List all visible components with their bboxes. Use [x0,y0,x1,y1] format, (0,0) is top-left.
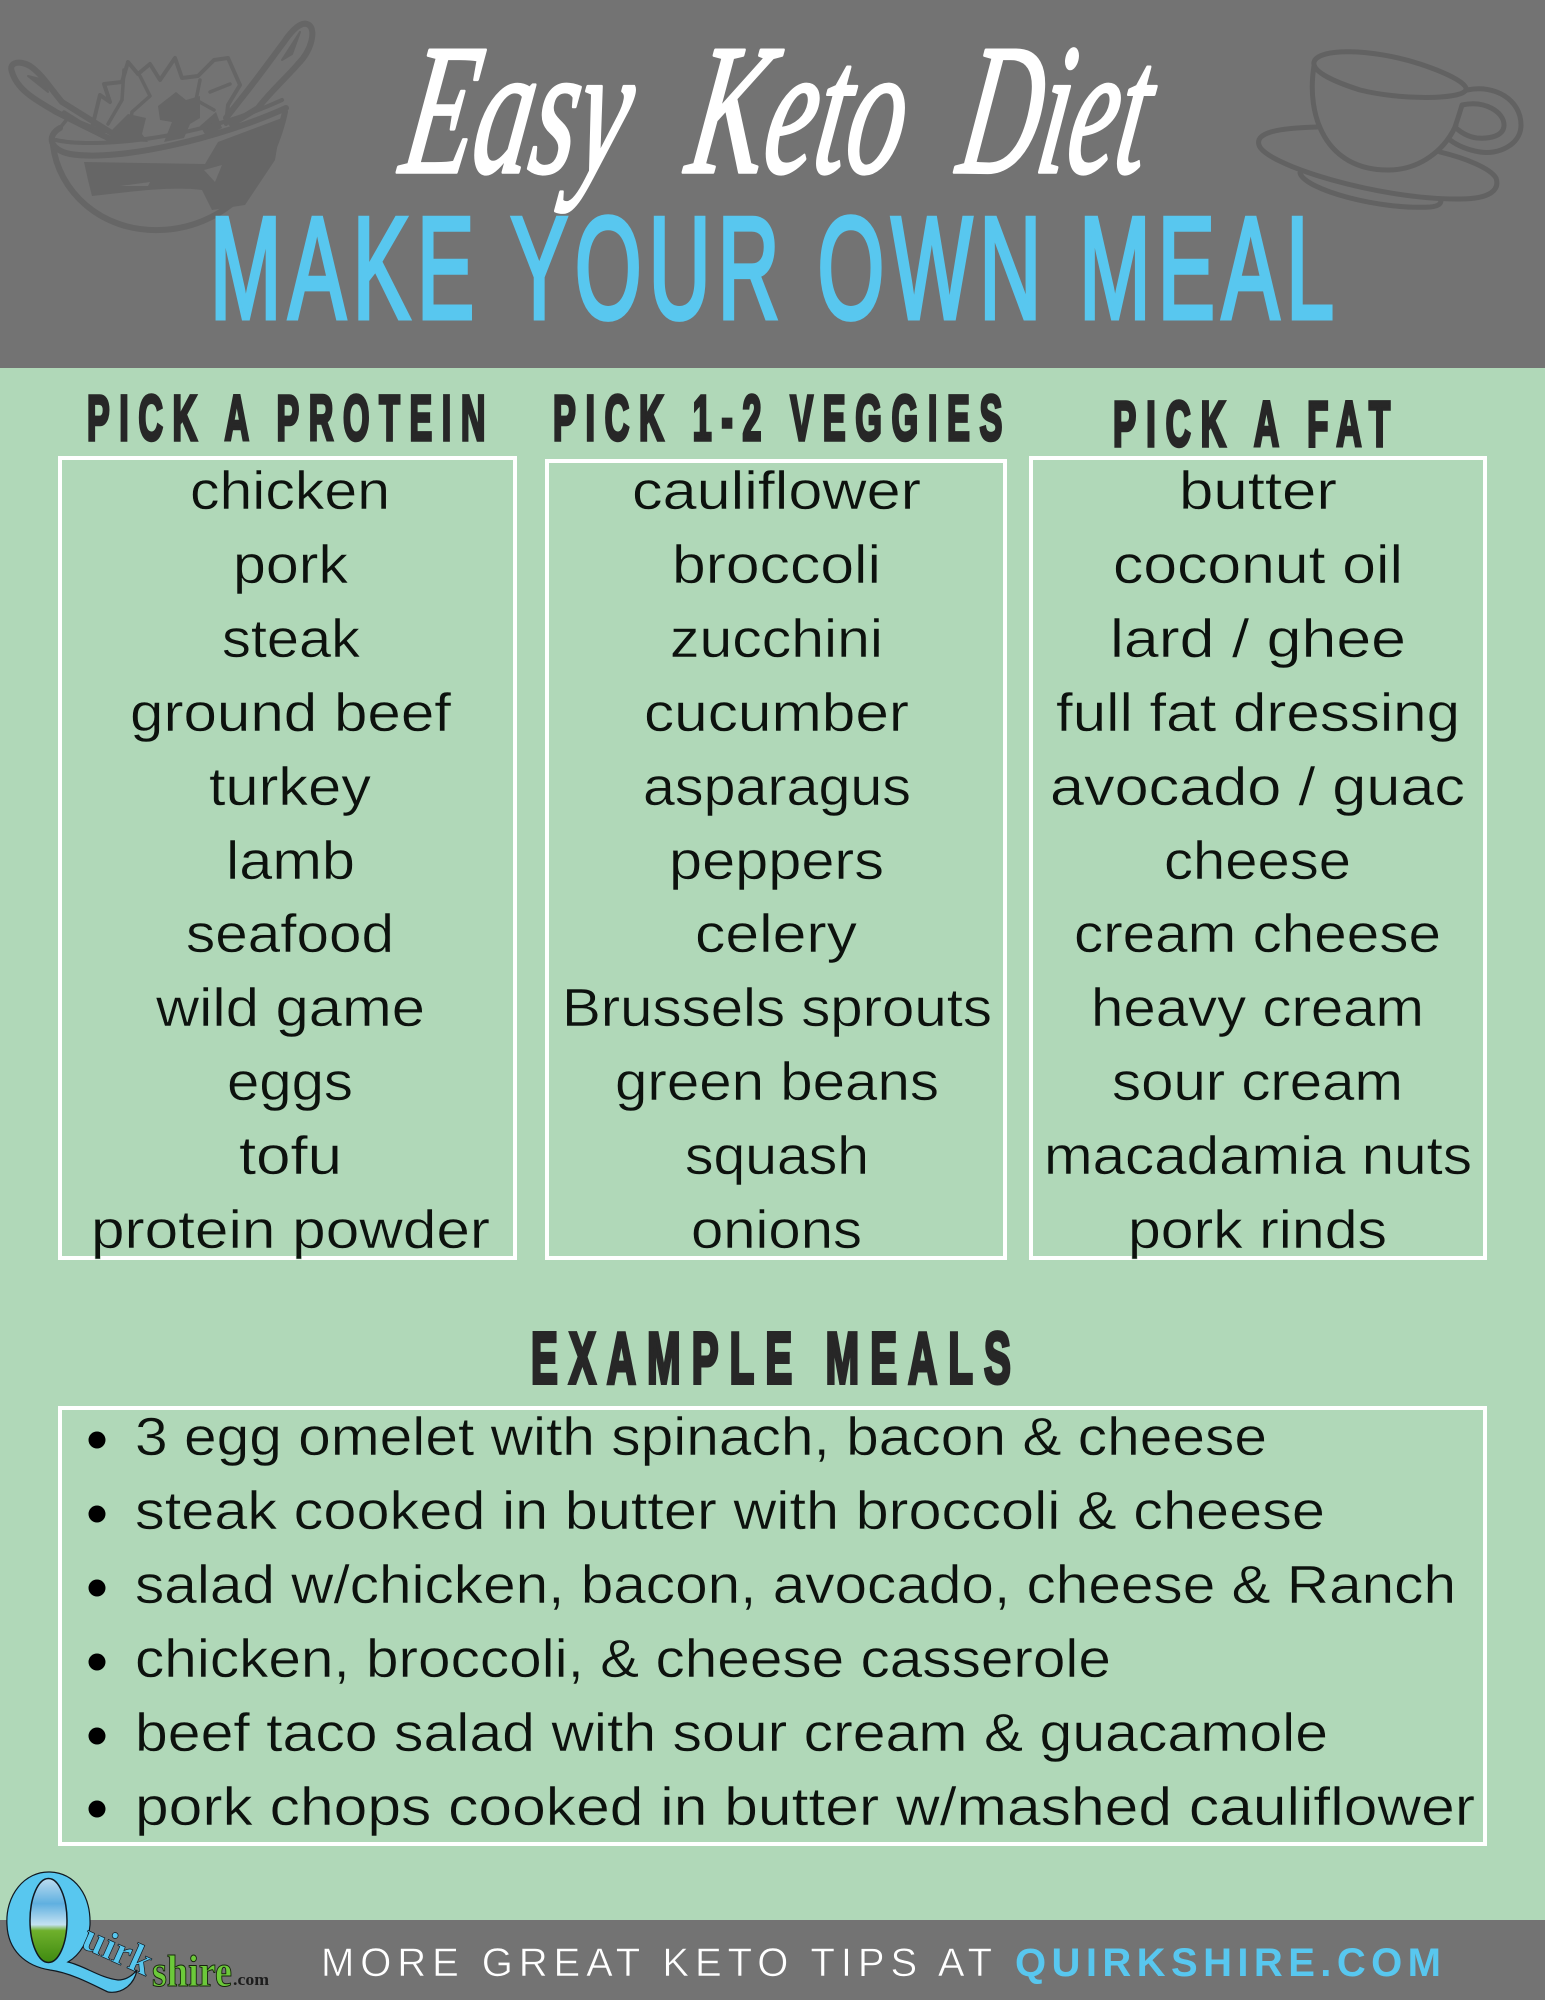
logo uirk: uirk [76,1914,161,1985]
header band [0,0,1545,368]
title script: Diet [947,7,1169,213]
panel: protein [60,382,515,1260]
logo shire: shire [152,1947,232,1996]
protein list: turkey [209,757,371,817]
protein list: pork [233,535,349,595]
panel: veggies [547,382,1012,1260]
cup body [1312,66,1456,170]
title script: Easy [390,7,649,213]
fat list: macadamia nuts [1044,1126,1472,1186]
veggies list: cauliflower [632,461,921,521]
panel: fat [1031,388,1485,1260]
veggies list: peppers [669,831,884,891]
meals list text: steak cooked in butter with broccoli & cheese [135,1481,1325,1541]
icon: salad bowl [11,24,312,230]
meals list text: pork chops cooked in butter w/mashed cauliflower [135,1777,1475,1837]
protein list [91,461,490,1260]
veggies list: celery [695,904,857,964]
veggies list [562,461,992,1260]
fat list: cream cheese [1074,904,1441,964]
footer link: QUIRKSHIRE.COM [1015,1941,1441,1985]
fat list: pork rinds [1128,1200,1387,1260]
heading: pick a protein: PICK A PROTEIN [87,382,495,454]
veggies list: broccoli [672,535,881,595]
fat box [1031,458,1485,1258]
meals list bullets [88,1432,106,1818]
panel: example meals [60,1319,1485,1844]
protein list: lamb [226,831,355,891]
footer call to action: MORE GREAT KETO TIPS AT [321,1941,992,1985]
meals list text [135,1407,1475,1837]
heading: pick 1-2 veggies: PICK 1-2 VEGGIES [553,382,1012,454]
protein list: protein powder [91,1200,490,1260]
protein list: seafood [186,904,394,964]
title script [390,7,1169,213]
veggies box [547,461,1005,1258]
veggies list: cucumber [644,683,909,743]
protein list: eggs [227,1052,353,1112]
salad leaves [92,58,240,128]
veggies list: onions [691,1200,862,1260]
cup rim [1314,52,1466,98]
icon: coffee cup and saucer [1259,52,1521,207]
bowl rim [52,108,286,156]
veggies list: green beans [615,1052,939,1112]
protein box [60,458,515,1258]
protein list: steak [222,609,361,669]
meals list text: beef taco salad with sour cream & guacamole [135,1703,1328,1763]
meals list text: salad w/chicken, bacon, avocado, cheese & Ranch [135,1555,1456,1615]
saucer [1259,127,1497,199]
veggies list: Brussels sprouts [562,978,992,1038]
fat list: coconut oil [1113,535,1403,595]
meals box [60,1408,1485,1844]
fat list: heavy cream [1091,978,1424,1038]
protein list: chicken [190,461,390,521]
bowl shading [84,118,282,210]
logo Q window [30,1878,67,1962]
cup handle [1450,89,1521,153]
meals list text: chicken, broccoli, & cheese casserole [135,1629,1111,1689]
right spoon [226,24,312,124]
fat list [1044,461,1472,1260]
fat list: cheese [1164,831,1351,891]
protein list: tofu [239,1126,342,1186]
bowl body [53,112,285,230]
fat list: lard / ghee [1110,609,1406,669]
fat list: sour cream [1112,1052,1403,1112]
protein list: wild game [155,978,425,1038]
veggies list: squash [685,1126,869,1186]
heading: example meals: EXAMPLE MEALS [531,1319,1022,1399]
title script: Keto [676,7,924,213]
logo: Quirkshire [7,1872,269,1996]
meals list text: 3 egg omelet with spinach, bacon & cheese [135,1407,1267,1467]
fat list: avocado / guac [1050,757,1465,817]
footer band [0,1920,1545,2000]
protein list: ground beef [130,683,452,743]
veggies list: zucchini [670,609,883,669]
veggies list: asparagus [643,757,911,817]
logo Q letter [7,1872,137,1992]
fat list: full fat dressing [1056,683,1460,743]
fat list: butter [1179,461,1337,521]
logo dot com: .com [233,1970,269,1989]
left spoon [11,63,118,140]
